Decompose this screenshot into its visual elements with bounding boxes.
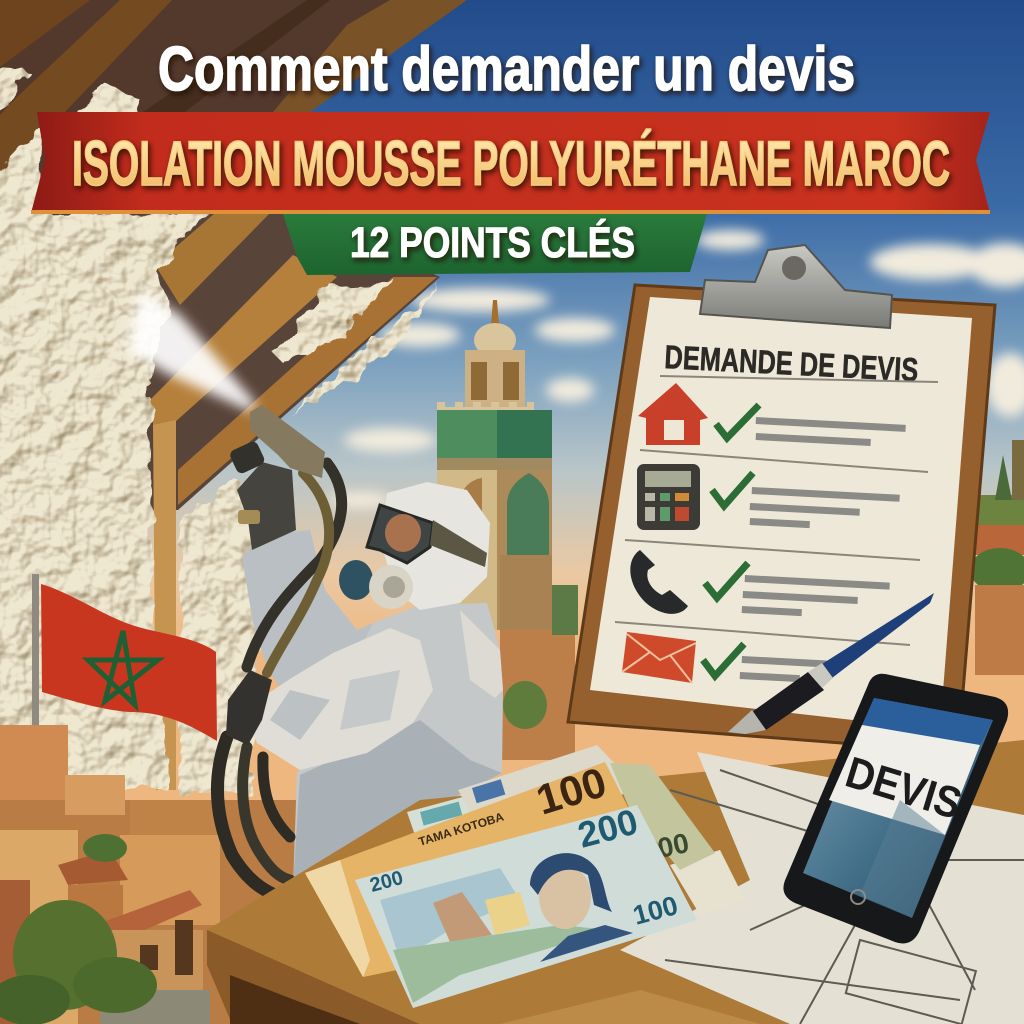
title: Comment demander un devis (158, 35, 855, 104)
tree (0, 834, 157, 1024)
minaret tower (437, 300, 552, 630)
face visor (367, 505, 433, 563)
green right note (610, 763, 715, 870)
text lines 1 (756, 417, 906, 446)
wooden table (207, 740, 1024, 1024)
icon: telephone (630, 550, 688, 614)
clipboard board (568, 285, 995, 752)
hood (380, 482, 490, 610)
teal back note (407, 795, 490, 850)
icon: envelope (622, 632, 696, 683)
Moroccan flag (32, 574, 217, 744)
front note 200: 200 (573, 801, 642, 856)
paper sheet (590, 297, 972, 730)
suit body (293, 603, 503, 887)
gloves (237, 462, 296, 550)
orange note 100 (305, 758, 690, 977)
spray gun (250, 405, 325, 478)
front sleeve (243, 628, 433, 770)
smartphone (783, 674, 1008, 944)
spray cloud (128, 290, 256, 412)
form heading: DEMANDE DE DEVIS (664, 338, 919, 388)
front note 200: 100 (630, 890, 681, 931)
clipboard (568, 245, 995, 752)
blue back note (458, 745, 640, 830)
text lines 2 (750, 487, 900, 528)
icon: house (638, 383, 708, 445)
icon: check 4 (703, 644, 744, 676)
raised arm sleeve (242, 530, 380, 720)
metal clip (700, 245, 892, 328)
spray foam insulation wall (0, 66, 440, 795)
banknotes (305, 745, 745, 1008)
green right note: 00 (655, 827, 692, 864)
red banner (31, 112, 990, 214)
orange note 100: 100 (531, 758, 612, 824)
green subtitle ribbon: 12 POINTS CLÉS (350, 219, 635, 267)
smartphone: DEVIS (840, 748, 967, 829)
text lines 4 (740, 656, 827, 682)
hoses (217, 463, 342, 900)
distant town and ramparts (500, 440, 1024, 760)
portrait (540, 925, 633, 962)
roof structure and rafters (0, 0, 467, 790)
text lines 3 (742, 575, 890, 616)
pen (728, 593, 934, 734)
foreground town (0, 725, 300, 1024)
respirator (430, 520, 487, 567)
worker in protective suit (217, 405, 503, 900)
icon: check 2 (712, 473, 753, 506)
icon: calculator (637, 464, 700, 530)
front note 200: 200 (368, 867, 406, 897)
icon: check 3 (705, 563, 748, 598)
form divider lines (615, 376, 938, 645)
orange note 100: TAMA KOTOBA (417, 810, 506, 849)
white back note (670, 850, 745, 915)
front note 200 (355, 801, 697, 1008)
blueprint plans (620, 752, 1024, 1024)
green subtitle ribbon (283, 214, 707, 275)
icon: check 1 (716, 405, 759, 438)
